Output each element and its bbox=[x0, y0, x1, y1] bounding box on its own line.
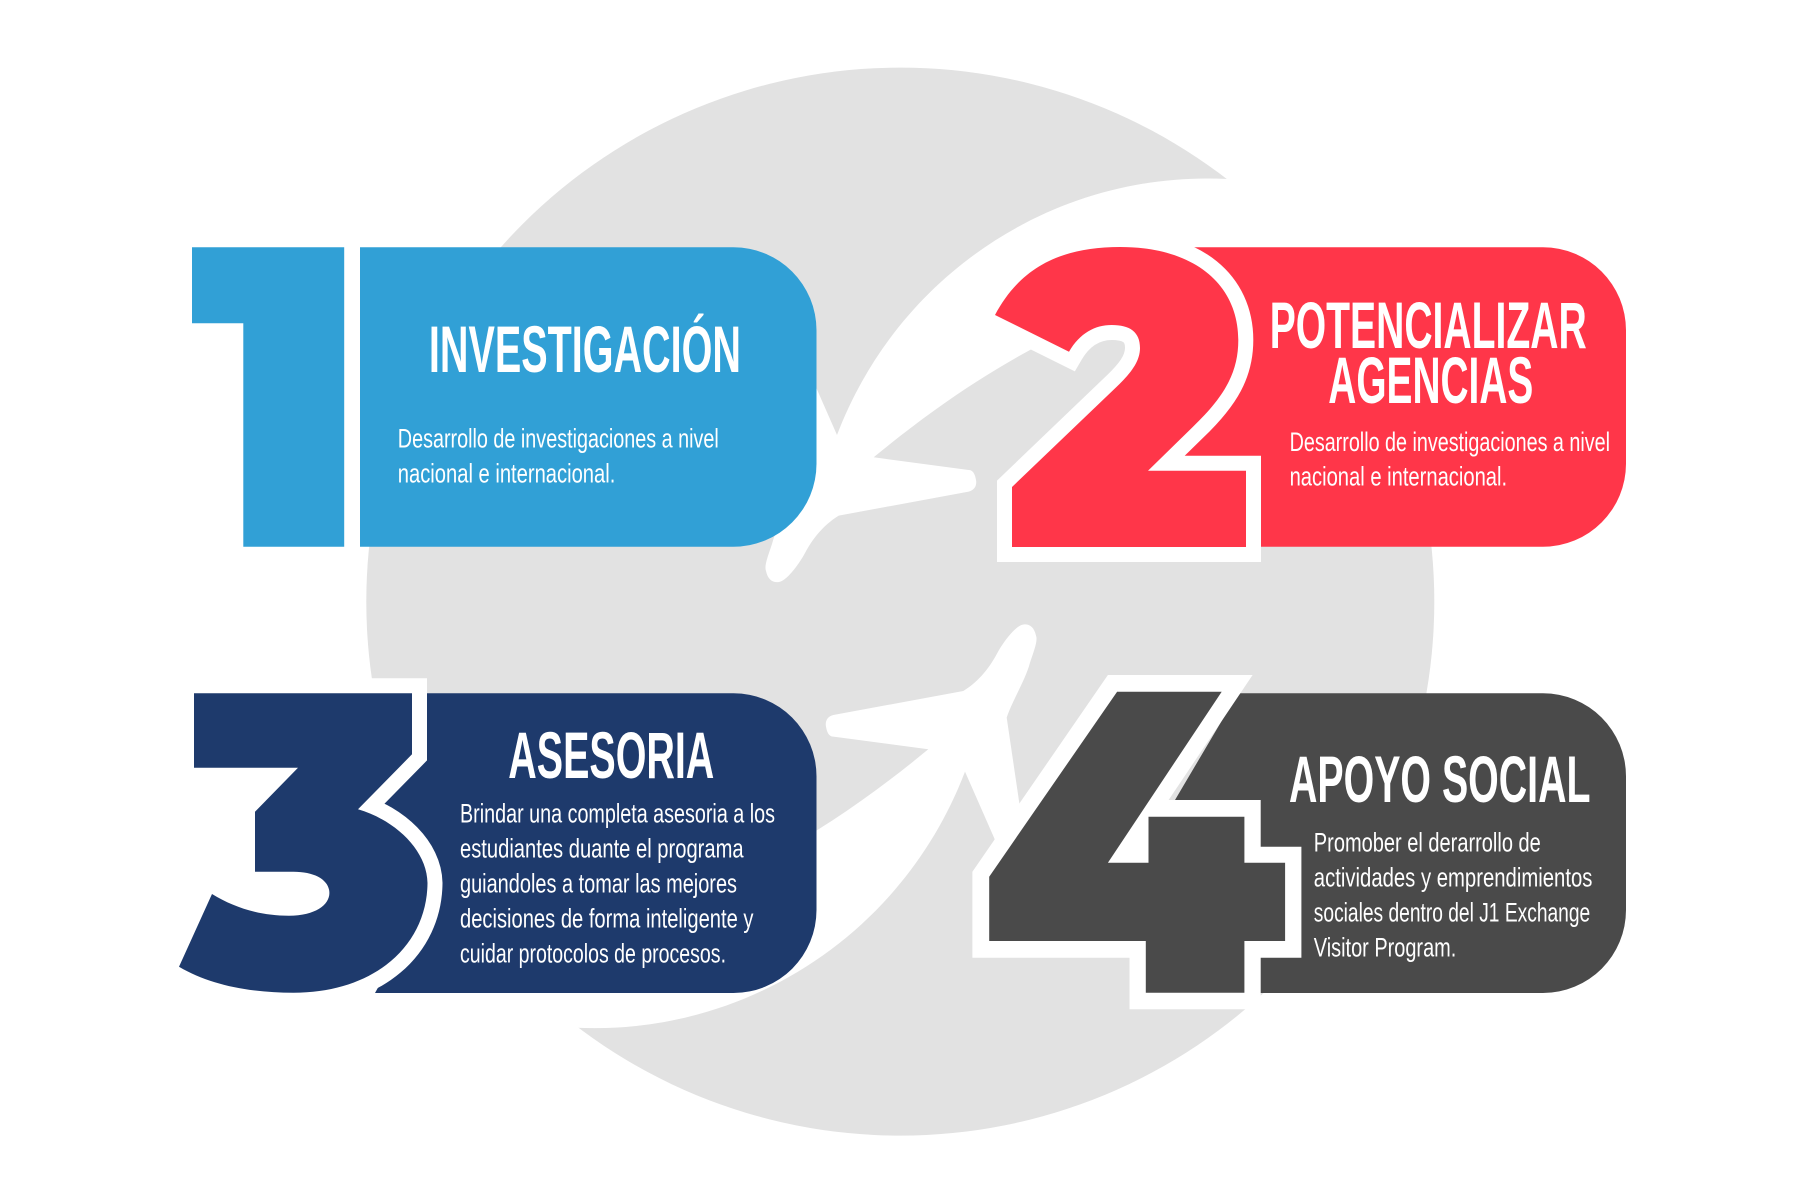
text block: step 3 description: Brindar una completa asesoria a los bbox=[460, 798, 775, 828]
text block: step 2 description: nacional e internacional. bbox=[1290, 462, 1507, 492]
icon: white airplane upper half bbox=[765, 170, 1320, 582]
icon: white airplane lower half bbox=[482, 624, 1037, 1037]
text block: step 4 description: Promober el derarrollo de bbox=[1314, 828, 1541, 858]
text block: step 3 description: guiandoles a tomar las mejores bbox=[460, 868, 737, 898]
panel: step 3 asesoria bbox=[179, 693, 816, 993]
number 4 outline bbox=[972, 675, 1301, 1009]
number 3 bbox=[179, 693, 428, 993]
heading: apoyo social: APOYO SOCIAL bbox=[1289, 742, 1590, 816]
text block: step 3 description bbox=[460, 798, 775, 969]
number 1 bbox=[192, 247, 344, 547]
panel 3 background bbox=[372, 693, 816, 993]
gray background circle bbox=[366, 68, 1434, 1136]
text block: step 4 description: actividades y emprendimientos bbox=[1314, 863, 1592, 893]
text block: step 2 description: Desarrollo de investigaciones a nivel bbox=[1290, 427, 1610, 457]
text block: step 3 description: cuidar protocolos de procesos. bbox=[460, 939, 726, 969]
number 2 bbox=[995, 247, 1246, 547]
panel: step 4 apoyo social bbox=[972, 675, 1626, 1009]
text block: step 3 description: estudiantes duante el programa bbox=[460, 833, 744, 863]
text block: step 1 description: nacional e internacional. bbox=[398, 459, 615, 489]
panel: step 2 potencializar agencias bbox=[995, 247, 1626, 547]
text block: step 1 description: Desarrollo de investigaciones a nivel bbox=[398, 424, 719, 454]
panel: step 1 investigación bbox=[192, 247, 816, 547]
heading: asesoria: ASESORIA bbox=[508, 718, 714, 792]
number 4 bbox=[989, 692, 1285, 993]
panel 4 background bbox=[1175, 693, 1626, 993]
panel 1 background bbox=[360, 247, 816, 547]
text block: step 4 description: sociales dentro del J1 Exchange bbox=[1314, 898, 1590, 928]
heading: investigación: INVESTIGACIÓN bbox=[429, 312, 741, 386]
heading: potencializar agencias bbox=[1270, 288, 1587, 417]
text block: step 2 description bbox=[1290, 427, 1610, 492]
heading: potencializar agencias: AGENCIAS bbox=[1328, 343, 1533, 417]
text block: step 4 description bbox=[1314, 828, 1592, 963]
text block: step 3 description: decisiones de forma inteligente y bbox=[460, 903, 754, 933]
heading: potencializar agencias: POTENCIALIZAR bbox=[1270, 288, 1587, 362]
text block: step 4 description: Visitor Program. bbox=[1314, 933, 1456, 963]
panel 2 background bbox=[1178, 247, 1626, 547]
text block: step 1 description bbox=[398, 424, 719, 489]
